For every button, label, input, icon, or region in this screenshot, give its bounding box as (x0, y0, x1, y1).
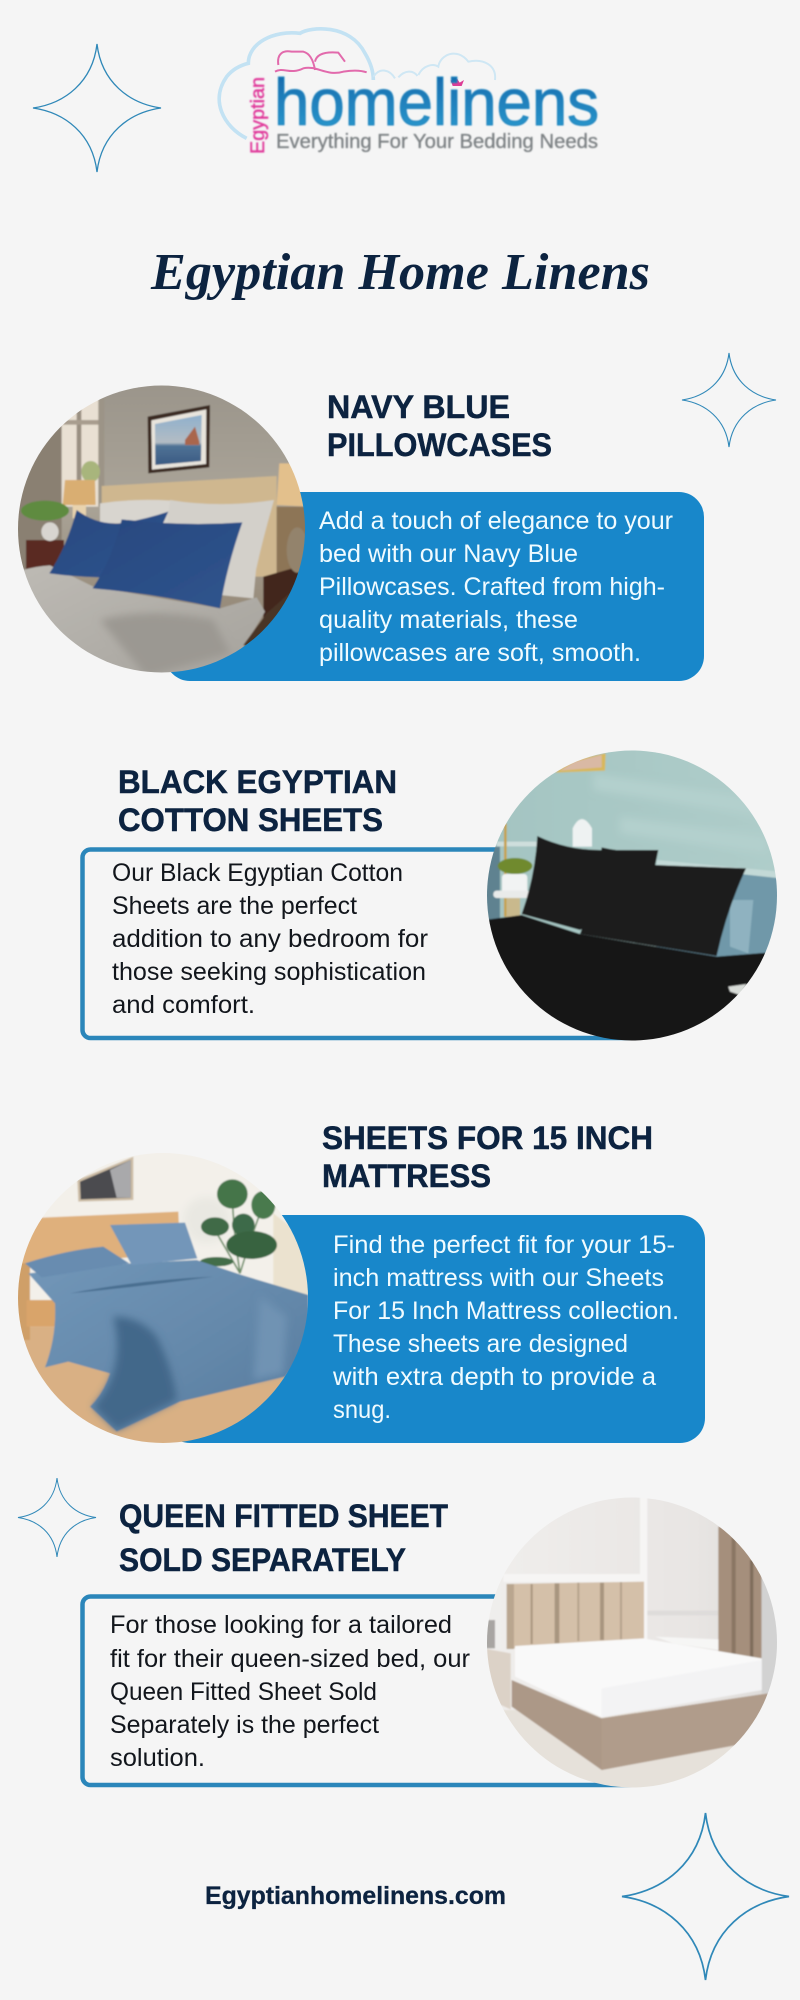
text: 15 inch description: These sheets are designed (333, 1330, 628, 1358)
icon: sparkle star near navy section (682, 353, 776, 447)
text: queen sheet description: Separately is the perfect (110, 1711, 379, 1739)
photo: black sheets bed (480, 743, 783, 1050)
logo tagline: Everything For Your Bedding Needs (276, 130, 598, 153)
text: navy blue description (319, 507, 673, 667)
panel: blue description background (165, 492, 704, 681)
heading: black egyptian cotton sheets: COTTON SHEETS (118, 802, 383, 838)
text: black sheets description (112, 859, 428, 1019)
text: queen sheet description: Queen Fitted Sheet Sold (110, 1678, 377, 1706)
heading: queen fitted sheet (119, 1498, 448, 1578)
logo: homelinens (219, 29, 599, 154)
text: 15 inch description: inch mattress with our Sheets (333, 1264, 664, 1292)
title: Egyptian Home Linens (150, 244, 650, 301)
heading: navy blue pillowcases (327, 389, 552, 463)
text: navy blue description: quality materials, these (319, 606, 578, 634)
text: navy blue description: pillowcases are soft, smooth. (319, 639, 641, 667)
section: queen fitted sheet sold separately (82, 1490, 783, 1797)
panel: blue description background (165, 1215, 705, 1443)
text: navy blue description: Pillowcases. Crafted from high- (319, 573, 665, 601)
logo wordmark: homelinens (274, 65, 599, 139)
heading: sheets for 15 inch mattress: MATTRESS (322, 1158, 491, 1194)
photo: bedroom with navy pillows (13, 380, 310, 687)
heading: black egyptian cotton sheets: BLACK EGYPTIAN (118, 764, 397, 800)
text: 15 inch description: For 15 Inch Mattress collection. (333, 1297, 679, 1325)
text: black sheets description: and comfort. (112, 991, 255, 1019)
panel: outlined description box (82, 850, 640, 1038)
photo: white fitted sheet bed (480, 1490, 783, 1797)
text: black sheets description: Sheets are the perfect (112, 892, 357, 920)
text: queen sheet description: For those looking for a tailored (110, 1611, 452, 1639)
text: queen sheet description: fit for their queen-sized bed, our (110, 1645, 470, 1673)
text: 15 inch description: snug. (333, 1396, 391, 1424)
text: 15 inch description: Find the perfect fit for your 15- (333, 1231, 675, 1259)
section: sheets for 15 inch mattress (10, 1120, 705, 1450)
photo: blue sheets bed (10, 1147, 317, 1450)
text: queen sheet description (110, 1611, 470, 1772)
text: black sheets description: Our Black Egyptian Cotton (112, 859, 403, 887)
text: 15 inch description (332, 1231, 679, 1424)
heading: queen fitted sheet: SOLD SEPARATELY (119, 1542, 406, 1578)
footer: website: Egyptianhomelinens.com (205, 1882, 506, 1910)
heading: sheets for 15 inch mattress (322, 1120, 653, 1194)
text: queen sheet description: solution. (110, 1744, 205, 1772)
heading: navy blue pillowcases: PILLOWCASES (327, 427, 552, 463)
logo clouds (219, 29, 495, 138)
text: 15 inch description: with extra depth to provide a (332, 1363, 656, 1391)
text: navy blue description: Add a touch of elegance to your (319, 507, 673, 535)
section: black egyptian cotton sheets (82, 743, 783, 1050)
section: navy blue pillowcases (13, 380, 704, 687)
panel: outlined description box (82, 1596, 640, 1785)
icon: sparkle star near queen section (18, 1478, 96, 1557)
icon: sparkle star bottom right (622, 1813, 789, 1980)
text: black sheets description: those seeking sophistication (112, 958, 426, 986)
text: black sheets description: addition to any bedroom for (112, 925, 428, 953)
heading: black egyptian cotton sheets (118, 764, 397, 838)
icon: sparkle star top left (33, 44, 161, 172)
logo Egyptian: Egyptian (248, 77, 269, 154)
heading: queen fitted sheet: QUEEN FITTED SHEET (119, 1498, 448, 1534)
heading: sheets for 15 inch mattress: SHEETS FOR 15 INCH (322, 1120, 653, 1156)
text: navy blue description: bed with our Navy Blue (319, 540, 578, 568)
heading: navy blue pillowcases: NAVY BLUE (327, 389, 510, 425)
